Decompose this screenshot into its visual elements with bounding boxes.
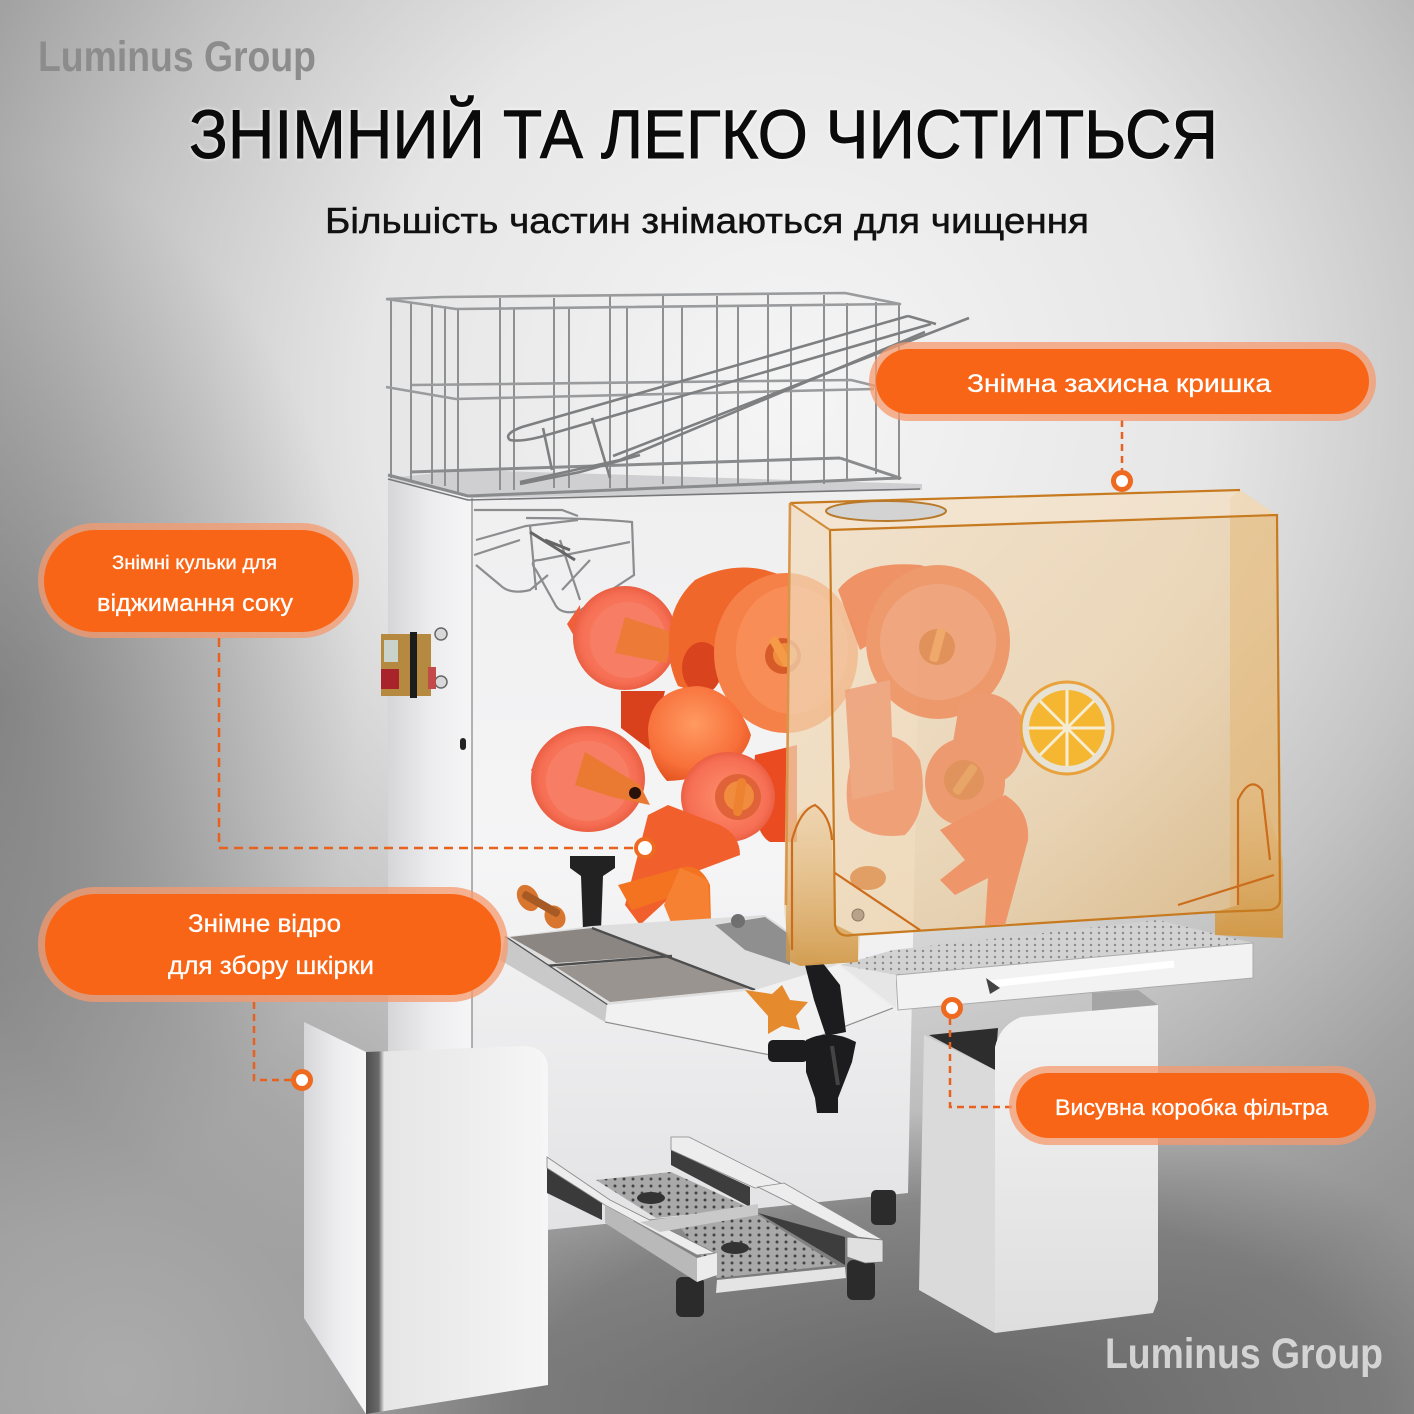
connector: juicing balls (219, 638, 654, 857)
cup upper left (567, 586, 677, 690)
filter box (919, 990, 1158, 1333)
cover corners (786, 805, 858, 966)
callout: removable cover (869, 342, 1376, 421)
cover body (784, 490, 1283, 966)
juicing guard wires (474, 510, 634, 612)
chute (618, 805, 740, 968)
drawer with filter (840, 920, 1253, 1010)
callout: peel bucket: для збору шкірки (168, 952, 374, 980)
dome cup centre (648, 686, 751, 781)
large round cup (714, 573, 858, 733)
callout: filter box: Висувна коробка фільтра (1055, 1095, 1329, 1120)
cover corner braces (792, 784, 1274, 950)
callout: juicing balls: віджимання соку (97, 590, 293, 617)
orange juicer cups (531, 568, 858, 968)
connector: removable cover (1114, 420, 1130, 490)
callout: juicing balls (38, 523, 359, 638)
juicer machine body (388, 470, 922, 1317)
cup dome back (669, 568, 830, 720)
watermark: top left: Luminus Group (38, 33, 316, 81)
callout: removable cover: Знімна захисна кришка (967, 370, 1271, 398)
cup bottom middle (681, 745, 797, 842)
feet (676, 1190, 896, 1317)
orange nut (745, 985, 808, 1034)
slide-out tray (547, 1137, 883, 1293)
bucket (304, 1022, 548, 1414)
cup lower left (531, 726, 650, 832)
subtitle: Більшість частин знімаються для чищення (325, 200, 1089, 241)
power switch (381, 628, 447, 698)
translucent cover (784, 490, 1283, 966)
callout: peel bucket: Знімне відро (188, 910, 341, 938)
spout tap (768, 962, 856, 1113)
basket handle (508, 316, 969, 484)
callout: filter box (1009, 1066, 1376, 1145)
callout: peel bucket (38, 887, 508, 1002)
icon: orange slice (1021, 682, 1113, 774)
title: ЗНІМНИЙ ТА ЛЕГКО ЧИСТИТЬСЯ (189, 96, 1218, 173)
cover opening (826, 501, 946, 521)
connector: peel bucket (254, 1002, 310, 1088)
cups seen through cover (838, 564, 1028, 925)
connector: filter box (944, 1000, 1012, 1107)
wire basket (386, 293, 969, 500)
callout: juicing balls: Знімні кульки для (112, 553, 277, 574)
drip tray (500, 914, 893, 1055)
small parts: black handle and orange screw (512, 856, 615, 932)
